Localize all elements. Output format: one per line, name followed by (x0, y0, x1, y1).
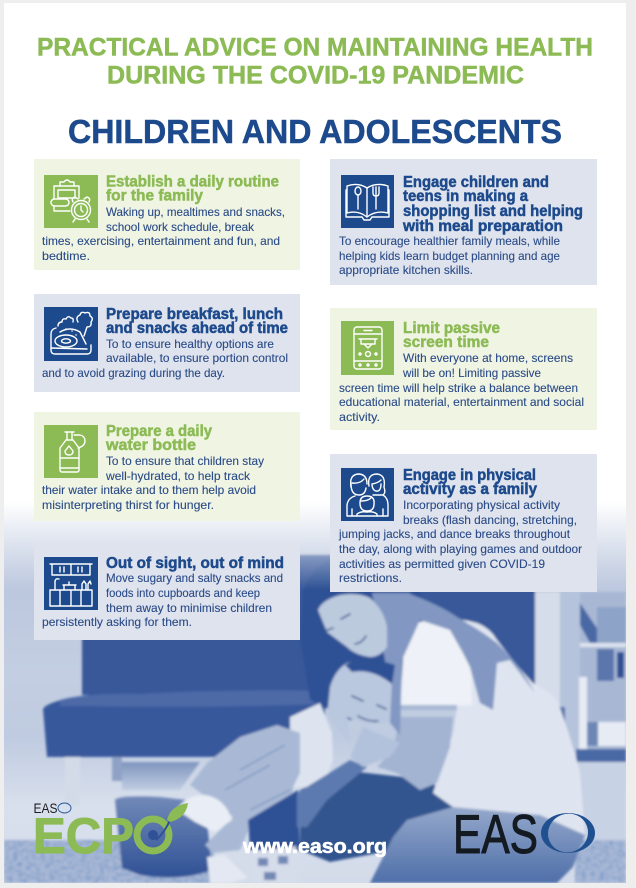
body text: activity. (339, 410, 380, 424)
body text: school work schedule, break (106, 220, 255, 234)
logo: EASO ECPO: ECP (33, 808, 134, 864)
icon: recipe book with spoon and fork (341, 175, 394, 228)
heading (106, 174, 279, 204)
body text: Waking up, mealtimes and snacks, (106, 205, 285, 219)
icon: family (341, 468, 394, 521)
body text: To to ensure that children stay (106, 454, 264, 468)
white fade over the top of the photo (4, 490, 626, 590)
body text: To to ensure healthy options are (106, 337, 274, 351)
heading: Engage in physical (403, 467, 536, 484)
body text: and to avoid grazing during the day. (42, 366, 225, 380)
body text: jumping jacks, and dance breaks throughout (338, 527, 571, 541)
body text (42, 454, 264, 512)
heading (106, 306, 288, 337)
body text: helping kids learn budget planning and age (339, 249, 560, 263)
heading: with meal preparation (402, 218, 563, 235)
body text: times, exercising, entertainment and fun, and (42, 234, 280, 248)
background: sofa (43, 555, 535, 806)
background: wall, shelves and floor on the right (535, 592, 626, 842)
heading: Engage children and (403, 174, 549, 191)
body text: Incorporating physical activity (403, 498, 560, 512)
panel: shopping list and meal preparation (330, 159, 597, 285)
panel: prepare a daily water bottle (34, 412, 300, 521)
heading: for the family (106, 188, 203, 204)
title: DURING THE COVID-19 PANDEMIC (107, 62, 524, 90)
body text: them away to minimise children (106, 601, 272, 615)
body text: activities as permitted given COVID-19 (339, 557, 545, 571)
title: PRACTICAL ADVICE ON MAINTAINING HEALTH (37, 34, 593, 62)
body text: foods into cupboards and keep (106, 586, 260, 600)
heading: Out of sight, out of mind (106, 555, 284, 572)
mother (300, 560, 585, 883)
heading: screen time (403, 334, 489, 351)
body text (42, 571, 283, 629)
body text: With everyone at home, screens (403, 351, 573, 365)
body text: the day, along with playing games and outdoor (339, 542, 582, 556)
body text: restrictions. (339, 571, 402, 585)
heading: Prepare breakfast, lunch (106, 306, 283, 323)
panel: prepare breakfast (34, 294, 300, 392)
website address: www.easo.org (242, 836, 387, 858)
background: rug and cushion (4, 796, 626, 883)
heading (402, 174, 583, 235)
logo: EASO ECPO (33, 800, 188, 864)
photo: mother hugging child (4, 500, 626, 883)
body text: well-hydrated, to help track (105, 469, 251, 483)
body text (339, 351, 584, 424)
heading (403, 320, 500, 351)
panel: establish a daily routine (34, 159, 300, 270)
heading: teens in making a (403, 188, 528, 205)
heading: water bottle (105, 437, 196, 454)
icon: meal on a tray (44, 307, 98, 361)
body text: screen time will help strike a balance between (339, 381, 578, 395)
heading: Establish a daily routine (106, 174, 279, 190)
heading (105, 423, 212, 454)
body text: bedtime. (42, 249, 90, 263)
heading (403, 467, 537, 498)
body text: appropriate kitchen skills. (339, 263, 473, 277)
body text: persistently asking for them. (42, 615, 192, 629)
icon: kitchen cupboards (44, 557, 98, 610)
body text: To encourage healthier family meals, while (339, 234, 560, 248)
body text (42, 205, 285, 263)
body text: available, to ensure portion control (106, 351, 288, 365)
panel: physical activity as a family (330, 454, 597, 592)
logo: EASO: EAS (453, 803, 538, 865)
body text: breaks (flash dancing, stretching, (403, 513, 577, 527)
icon: water bottle (44, 425, 98, 478)
body text: educational material, entertainment and social (339, 395, 584, 409)
body text (338, 498, 582, 585)
heading: shopping list and helping (403, 203, 583, 220)
heading: Prepare a daily (106, 423, 212, 440)
logo: EASO ECPO: EAS (34, 800, 58, 816)
heading: and snacks ahead of time (106, 320, 288, 337)
body text: will be on! Limiting passive (402, 366, 541, 380)
panel: out of sight, out of mind (34, 543, 300, 640)
icon: clipboard and alarm clock (44, 175, 98, 228)
heading: children and adolescents: CHILDREN AND ADOLESCENTS (68, 113, 562, 150)
title (37, 34, 593, 90)
body text (42, 337, 288, 380)
body text: misinterpreting thirst for hunger. (42, 498, 214, 512)
body text: their water intake and to them help avoid (42, 483, 256, 497)
heading: Limit passive (403, 320, 500, 337)
icon: smartphone (341, 321, 394, 375)
child (177, 660, 400, 883)
body text: Move sugary and salty snacks and (106, 571, 283, 585)
panel: limit passive screen time (330, 308, 597, 430)
heading: activity as a family (403, 481, 537, 498)
body text (339, 234, 560, 277)
